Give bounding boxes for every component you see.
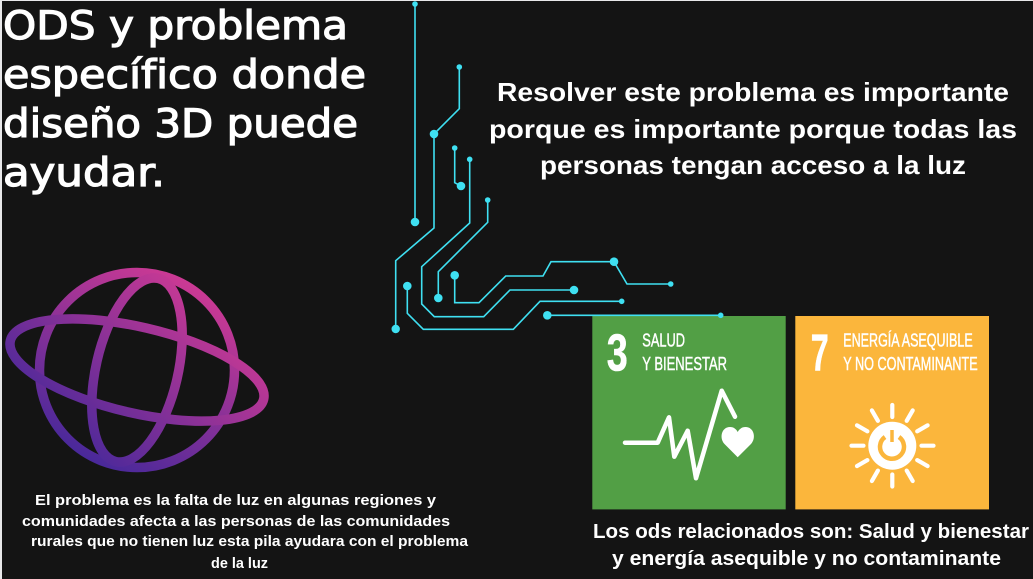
related SDGs caption: Los ods relacionados son: Salud y bienestar (593, 521, 1029, 543)
SDG 3 label: Y BIENESTAR (642, 353, 727, 374)
title: específico donde (3, 53, 366, 98)
importance statement: personas tengan acceso a la luz (540, 150, 966, 180)
problem description (22, 492, 469, 572)
SDG 3 label: SALUD (642, 330, 685, 351)
SDG 7 label (811, 325, 978, 383)
importance statement (489, 77, 1017, 180)
related SDGs caption: y energía asequible y no contaminante (612, 548, 1001, 570)
importance statement: porque es importante porque todas las (489, 114, 1017, 144)
related SDGs caption (593, 521, 1029, 570)
circuit lines (392, 1, 724, 333)
SDG 7 label: ENERGÍA ASEQUIBLE (843, 330, 973, 351)
problem description: El problema es la falta de luz en algunas regiones y (35, 492, 437, 509)
problem description: de la luz (211, 555, 268, 572)
title: ODS y problema (3, 4, 348, 49)
problem description: rurales que no tienen luz esta pila ayudara con el problema (31, 533, 469, 550)
SDG 7 label: 7 (811, 325, 829, 383)
icon: sun with power symbol (852, 405, 934, 486)
problem description: comunidades afecta a las personas de las comunidades (22, 513, 450, 530)
title: diseño 3D puede (3, 102, 358, 147)
panel: SDG 3 (592, 316, 786, 509)
SDG 3 label: 3 (607, 325, 628, 383)
icon: globe (1, 269, 273, 471)
panel: SDG 7 (795, 316, 989, 509)
icon: heartbeat (625, 391, 754, 478)
importance statement: Resolver este problema es importante (497, 77, 1009, 107)
title: ayudar. (3, 151, 165, 196)
SDG 3 label (607, 325, 727, 383)
title (3, 4, 366, 196)
